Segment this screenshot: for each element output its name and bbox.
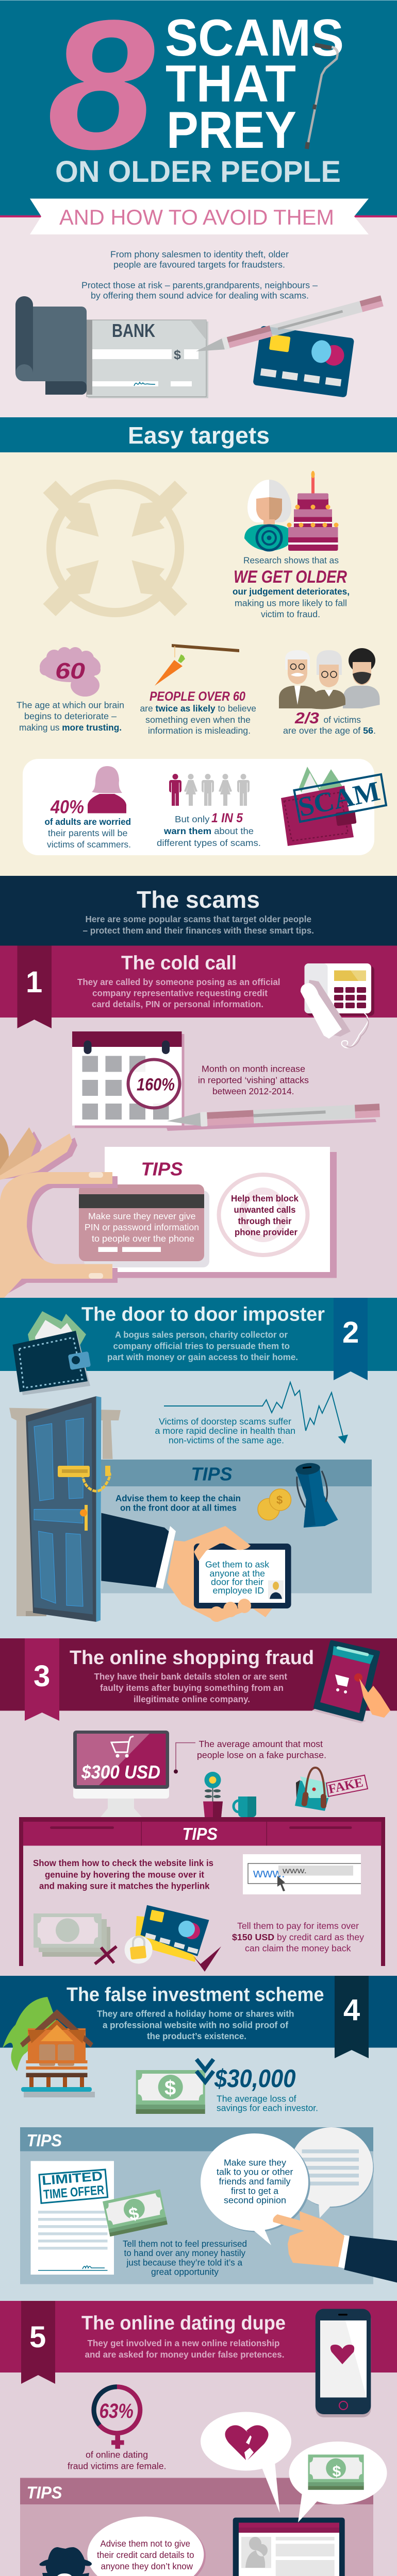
section: 3 online shopping fraud xyxy=(0,1638,397,1976)
ID text xyxy=(205,1559,269,1596)
stat text: vishing: Month on month increase xyxy=(202,1063,305,1074)
illustration: pen xyxy=(194,295,384,358)
description: They are called by someone posing as an official xyxy=(77,977,280,987)
description xyxy=(77,977,280,1009)
tip: do not feel pressurised xyxy=(123,2239,247,2277)
icon: telephone xyxy=(301,963,374,1048)
section: 4 false investment scheme xyxy=(0,1976,397,2301)
white speech bubble xyxy=(201,2133,310,2245)
stat text: doorstep xyxy=(155,1416,295,1446)
description: part with money or gain access to their home. xyxy=(107,1352,298,1362)
panel: worried adults: But only xyxy=(175,814,210,824)
illustration: cheque book xyxy=(15,296,208,398)
stat text: doorstep: Victims of doorstep scams suffer xyxy=(159,1416,291,1427)
document with stamp: TIME OFFER xyxy=(43,2183,105,2202)
description xyxy=(107,1329,298,1362)
description: and are asked for money under false pretences. xyxy=(85,2349,285,2360)
heading: The false investment scheme xyxy=(67,1984,324,2006)
stat text: vishing: in reported ‘vishing’ attacks xyxy=(198,1075,309,1085)
tip: PIN card: PIN or password information xyxy=(85,1222,199,1232)
stat: $30,000 xyxy=(196,2059,318,2113)
stat: carrot on a stick: PEOPLE OVER 60 xyxy=(150,689,245,704)
heading: The online shopping fraud xyxy=(70,1647,314,1669)
illustration: door with chain xyxy=(9,1396,121,1622)
stat: we get older: WE GET OLDER xyxy=(234,567,347,587)
stat text: victims are female: fraud victims are female. xyxy=(68,2461,166,2471)
section: easy targets xyxy=(0,417,397,876)
panel: worried adults: of adults are worried xyxy=(44,817,131,827)
stat: victims over 56: 2/3 xyxy=(294,709,319,727)
speech bubble: broken heart xyxy=(201,2412,291,2513)
stat: $30,000: $30,000 xyxy=(214,2065,296,2093)
section: 1 the cold call xyxy=(0,946,397,1298)
stat text: victims are female xyxy=(68,2449,166,2471)
section: the scams intro: – protect them and their finances with these smart tips. xyxy=(82,925,314,936)
illustration: hand holding ID xyxy=(101,1513,291,1622)
illustration: url hover: www. xyxy=(253,1867,285,1880)
stat: carrot on a stick xyxy=(140,644,256,736)
stat: brain at 60: begins to deteriorate – xyxy=(24,711,117,721)
tip: block calls stamp: unwanted calls xyxy=(234,1205,296,1215)
title text: THAT xyxy=(166,55,296,113)
tip: pay by credit card: $150 USD by credit card as they xyxy=(232,1932,364,1942)
ribbon banner: AND HOW TO AVOID THEM xyxy=(59,205,334,229)
tip: PIN card xyxy=(79,1184,209,1267)
chart: health decline line xyxy=(164,1382,348,1444)
illustration: pen xyxy=(166,1103,380,1131)
description xyxy=(97,2008,294,2041)
panel: worried adults: warn them about the xyxy=(163,826,254,836)
stat: we get older: victim to fraud. xyxy=(261,609,320,619)
title text: SCAMS xyxy=(165,9,344,67)
chart: 63 percent female ring: 63% xyxy=(99,2400,134,2422)
panel: tips: TIPS xyxy=(27,2483,62,2502)
money bill tilted: $ xyxy=(127,2204,141,2225)
intro text: by offering them sound advice for dealing with scams. xyxy=(91,291,309,301)
tip: block calls stamp xyxy=(219,1175,307,1255)
tip: check the link: Show them how to check the website link is xyxy=(33,1858,213,1868)
stat text: vishing xyxy=(198,1063,309,1096)
stat: carrot on a stick: something even when the xyxy=(145,715,251,725)
ribbon number 5: 5 xyxy=(29,2320,46,2354)
tip: PIN card: Make sure they never give xyxy=(88,1211,196,1221)
panel: worried adults: 40% xyxy=(50,796,84,817)
ribbon number 3 xyxy=(25,1638,59,1721)
illustration: cheque book: $ xyxy=(174,348,181,362)
tip: check the link: and making sure it matches the hyperlink xyxy=(39,1880,210,1891)
document with stamp xyxy=(31,2161,114,2275)
icon: tablet shopping xyxy=(312,1641,390,1723)
ribbon number 2 xyxy=(334,1298,368,1380)
panel: tips: Advise them to keep the chain xyxy=(115,1493,241,1503)
panel: tips xyxy=(101,1460,372,1593)
icon: fake handbag: FAKE xyxy=(327,1775,365,1797)
white speech bubble: second opinion xyxy=(224,2195,286,2205)
chain lock xyxy=(58,1466,110,1531)
panel: worried adults: their parents will be xyxy=(48,828,128,838)
icon: money bill: $ xyxy=(164,2077,176,2099)
panel: desk tips: TIPS xyxy=(183,1824,218,1843)
icon: computer monitor: $300 USD xyxy=(81,1761,160,1783)
description: card details, PIN or personal information. xyxy=(92,999,263,1009)
ribbon number 3: 3 xyxy=(34,1659,50,1693)
stat: victims over 56 xyxy=(279,648,379,736)
pictogram: one in five xyxy=(169,774,250,806)
white speech bubble: first to get a xyxy=(231,2185,278,2196)
stat text: doorstep: non-victims of the same age. xyxy=(169,1435,284,1446)
illustration: secure cards xyxy=(125,1905,221,1972)
tip: pay by credit card: can claim the money back xyxy=(245,1943,351,1954)
stat: we get older: our judgement deteriorates, xyxy=(233,586,350,597)
section: title header xyxy=(0,0,397,433)
icon: coins xyxy=(258,1489,291,1520)
icon: older woman with target xyxy=(244,480,294,551)
icon: flower pot xyxy=(203,1772,223,1817)
illustration: credit card xyxy=(253,326,354,398)
tip: block calls stamp: phone provider xyxy=(235,1227,297,1238)
stat: brain at 60 xyxy=(16,647,124,733)
tip: check the link: genuine by hovering the mouse over it xyxy=(45,1869,204,1879)
tip: do not feel pressurised: great opportunity xyxy=(151,2267,219,2277)
description xyxy=(85,2338,285,2360)
stat: carrot on a stick: information is misleading. xyxy=(148,725,251,736)
ribbon number 4 xyxy=(335,1976,369,2058)
icon: computer monitor xyxy=(73,1731,169,1817)
money bill tilted xyxy=(103,2189,168,2236)
white speech bubble: friends and family xyxy=(219,2176,291,2187)
panel: desk tips xyxy=(19,1817,385,1972)
label BANK: BANK xyxy=(112,320,155,341)
icon: woman silhouette xyxy=(88,766,126,813)
stat: victims over 56: of victims xyxy=(324,715,361,725)
illustration: url hover xyxy=(243,1854,361,1894)
icon: walking stick xyxy=(307,45,338,149)
tip: block calls stamp: through their xyxy=(238,1216,292,1226)
speech bubble: money xyxy=(289,2442,387,2522)
stat: $30,000: savings for each investor. xyxy=(217,2103,318,2113)
stat: carrot on a stick: are twice as likely to believe xyxy=(140,703,256,714)
calendar with 160%: 160% xyxy=(137,1075,175,1094)
icon: collection tin xyxy=(295,1462,338,1528)
connector and stat text xyxy=(174,1739,326,1773)
tip: PIN card: to people over the phone xyxy=(92,1233,194,1244)
section: the scams intro: The scams xyxy=(137,886,260,913)
tip: check the link xyxy=(33,1858,213,1891)
panel: tips card xyxy=(79,1147,337,1278)
intro text: people are favoured targets for fraudsters. xyxy=(113,260,285,270)
illustration: hand holding card xyxy=(0,1127,118,1298)
icon: holiday home xyxy=(3,1997,95,2097)
grey speech bubble xyxy=(290,2127,374,2218)
illustration: pointing hand xyxy=(273,2211,397,2282)
description: They are offered a holiday home or shares with xyxy=(97,2008,294,2019)
ribbon number 5 xyxy=(21,2301,55,2384)
speech bubble: advice: Advise them not to give xyxy=(100,2538,190,2549)
icon: scammer silhouette xyxy=(25,2547,107,2576)
white speech bubble: Make sure they xyxy=(224,2158,286,2168)
stat text: vishing: between 2012-2014. xyxy=(212,1086,294,1096)
icon: coins: $ xyxy=(276,1494,283,1506)
ID text: Get them to ask xyxy=(205,1559,269,1569)
description: They have their bank details stolen or are sent xyxy=(94,1671,287,1682)
icon: smartphone with heart xyxy=(316,2309,371,2417)
ribbon number 1: 1 xyxy=(26,965,42,999)
heading: Easy targets xyxy=(128,422,270,449)
stat: brain at 60: 60 xyxy=(55,658,86,684)
section: 5 online dating dupe xyxy=(0,2301,397,2576)
intro text: From phony salesmen to identity theft, older xyxy=(110,249,289,260)
stat text: victims are female: of online dating xyxy=(86,2449,148,2460)
icon: money bill xyxy=(136,2070,205,2114)
description: company representative requesting credit xyxy=(92,988,268,998)
heading: The door to door imposter xyxy=(81,1303,325,1325)
icon: laptop profile xyxy=(223,2518,355,2576)
panel: worried adults: 1 IN 5 xyxy=(211,811,243,825)
icon: wallet with money xyxy=(12,1311,91,1395)
heading: The cold call xyxy=(121,952,237,974)
stat: $30,000: The average loss of xyxy=(217,2094,296,2104)
ID text: door for their xyxy=(211,1577,263,1587)
ribbon number 4: 4 xyxy=(343,1993,360,2027)
panel: tips: TIPS xyxy=(191,1463,232,1485)
icon: fake handbag xyxy=(295,1768,368,1811)
title text xyxy=(165,9,344,159)
tip: do not feel pressurised: to hand over any money hastily xyxy=(124,2248,245,2258)
title text: PREY xyxy=(167,101,296,159)
connector and stat text: The average amount that most xyxy=(199,1739,323,1749)
stat: we get older xyxy=(233,555,350,619)
stat: we get older: making us more likely to fall xyxy=(235,598,347,608)
ribbon number 1 xyxy=(18,946,52,1028)
description: A bogus sales person, charity collector or xyxy=(115,1329,288,1340)
illustration: cash crossed xyxy=(34,1913,117,1964)
tip: do not feel pressurised: Tell them not to feel pressurised xyxy=(123,2239,247,2249)
description: a professional website with no solid proof of xyxy=(103,2020,288,2030)
ribbon number 2: 2 xyxy=(342,1316,359,1349)
intro text xyxy=(81,249,318,301)
panel: tips: TIPS xyxy=(27,2131,62,2150)
tip: do not feel pressurised: just because they’re told it’s a xyxy=(126,2258,242,2268)
icon: wallet with scam stamp xyxy=(281,767,386,846)
section: the scams intro xyxy=(0,876,397,946)
panel: tips: on the front door at all times xyxy=(120,1502,237,1513)
panel: worried adults xyxy=(23,759,386,855)
ID text: anyone at the xyxy=(209,1568,265,1579)
ribbon banner xyxy=(30,199,369,234)
panel: worried adults: victims of scammers. xyxy=(47,839,131,850)
chart: 63 percent female ring xyxy=(94,2387,140,2449)
tip: block calls stamp: Help them block xyxy=(231,1193,299,1204)
connector and stat text: people lose on a fake purchase. xyxy=(197,1750,326,1760)
speech bubble: advice xyxy=(87,2516,206,2576)
stat text: doorstep: a more rapid decline in health than xyxy=(155,1426,295,1436)
speech bubble: advice: their credit card details to xyxy=(97,2550,194,2560)
icon: target arrows watermark xyxy=(43,481,188,616)
speech bubble: advice: anyone they don’t know xyxy=(101,2561,193,2571)
panel: tips card: TIPS xyxy=(141,1158,183,1180)
stat: we get older: Research shows that as xyxy=(243,555,339,566)
ID text: employee ID xyxy=(212,1585,264,1596)
intro text: Protect those at risk – parents,grandparents, neighbours – xyxy=(81,280,318,291)
white speech bubble: talk to you or other xyxy=(217,2167,293,2177)
description: illegitimate online company. xyxy=(134,1694,250,1704)
illustration: url hover: www. xyxy=(282,1867,307,1875)
description xyxy=(94,1671,287,1704)
stat: brain at 60: making us more trusting. xyxy=(19,722,122,733)
section: 2 door to door imposter xyxy=(0,1298,397,1638)
calendar with 160% xyxy=(72,1031,185,1128)
stat: victims over 56: are over the age of 56. xyxy=(283,725,376,736)
panel: worried adults: different types of scams. xyxy=(157,838,261,848)
icon: wallet with scam stamp: SCAM xyxy=(295,775,383,823)
tip: pay by credit card: Tell them to pay for items over xyxy=(237,1921,359,1931)
icon: mug xyxy=(234,1797,256,1817)
tip: pay by credit card xyxy=(232,1921,364,1954)
description: company official tries to persuade them to xyxy=(113,1341,290,1351)
document with stamp: LIMITED xyxy=(41,2169,103,2188)
panel: tips xyxy=(20,2478,373,2576)
description: faulty items after buying something from an xyxy=(100,1683,284,1693)
subtitle: ON OLDER PEOPLE xyxy=(55,155,341,189)
icon: birthday cake xyxy=(287,471,338,551)
speech bubble: money: $ xyxy=(333,2463,341,2480)
description: They get involved in a new online relationship xyxy=(88,2338,279,2348)
section: the scams intro: Here are some popular scams that target older people xyxy=(86,914,311,924)
stat: brain at 60: The age at which our brain xyxy=(16,700,124,710)
description: the product’s existence. xyxy=(147,2031,246,2041)
panel: tips xyxy=(20,2127,397,2284)
heading: The online dating dupe xyxy=(81,2312,286,2334)
